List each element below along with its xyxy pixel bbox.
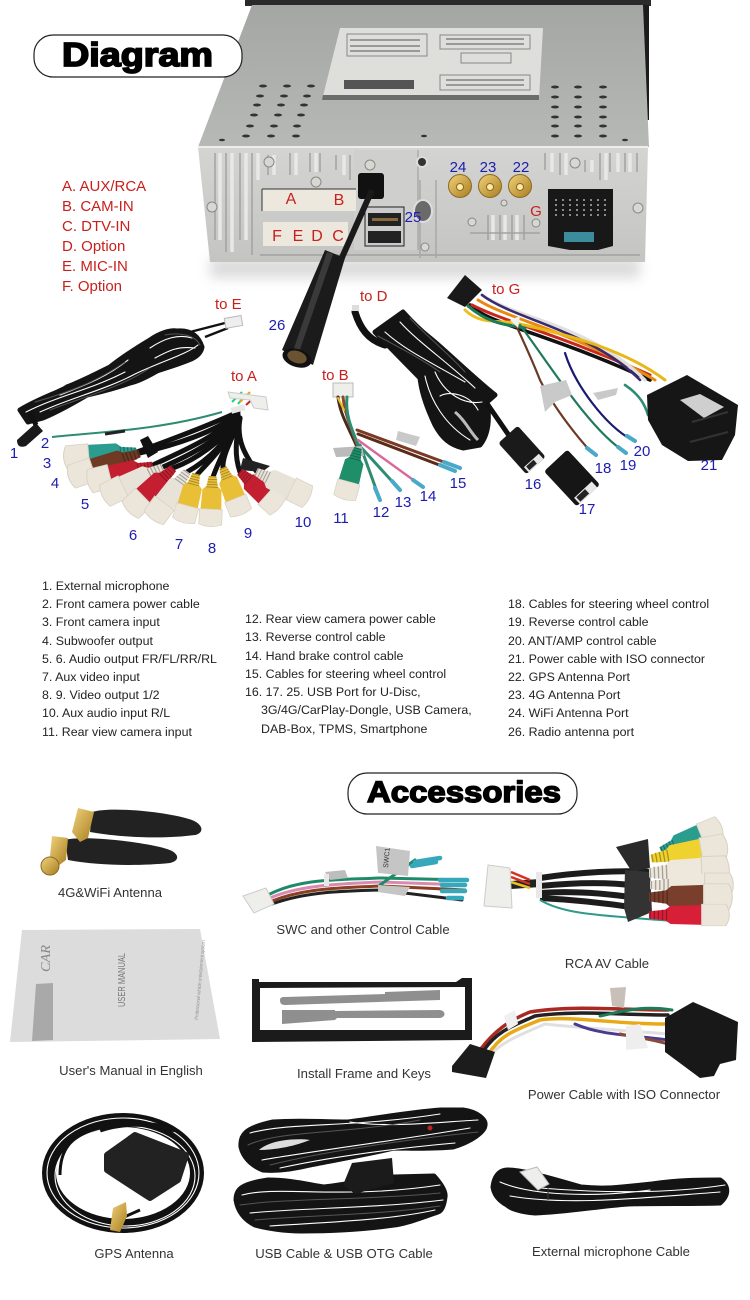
parts list column 2: 3G/4G/CarPlay-Dongle, USB Camera,	[261, 703, 472, 717]
legend: ports A to F: A. AUX/RCA	[62, 178, 146, 195]
parts list column 1: 2. Front camera power cable	[42, 597, 200, 611]
power harness with ISO connector	[447, 275, 738, 461]
parts list column 3: 19. Reverse control cable	[508, 615, 649, 629]
numbers 1 to 10: 2	[41, 435, 49, 452]
numbers 11 to 15: 12	[373, 504, 389, 521]
numbers 18 to 21: 21	[701, 457, 717, 474]
port block A and B: B	[334, 192, 344, 209]
heading: Accessories: Accessories	[367, 776, 561, 809]
parts list column 2: 12. Rear view camera power cable	[245, 612, 436, 626]
parts list column 1: 1. External microphone	[42, 579, 170, 593]
parts list column 1	[42, 579, 217, 739]
control cable harness 11 to 15	[333, 383, 460, 503]
parts list column 1: 8. 9. Video output 1/2	[42, 688, 160, 702]
caption: GPS Antenna: GPS Antenna	[94, 1246, 174, 1261]
port labels: 24	[450, 159, 466, 176]
numbers 18 to 21: 19	[620, 457, 636, 474]
accessory: GPS antenna	[47, 1118, 199, 1232]
label: to A: to A	[231, 368, 257, 385]
legend: ports A to F: F. Option	[62, 278, 122, 295]
legend: ports A to F: D. Option	[62, 238, 125, 255]
power socket	[548, 189, 613, 250]
parts list column 1: 3. Front camera input	[42, 615, 160, 629]
legend: ports A to F	[62, 178, 146, 295]
parts list column 1: 7. Aux video input	[42, 670, 140, 684]
parts list column 1: 11. Rear view camera input	[42, 725, 192, 739]
accessory: external microphone cable	[493, 1167, 727, 1213]
numbers 11 to 15: 13	[395, 494, 411, 511]
parts list column 3	[508, 597, 709, 739]
legend: ports A to F: E. MIC-IN	[62, 258, 128, 275]
port block C D E F: E	[293, 228, 303, 245]
external microphone cable	[17, 316, 243, 447]
USB cable	[352, 305, 600, 506]
label: to D: to D	[360, 288, 388, 305]
port block C D E F: D	[311, 228, 323, 245]
numbers 11 to 15: 14	[420, 488, 436, 505]
parts list column 2: 13. Reverse control cable	[245, 630, 386, 644]
label: to G: to G	[492, 281, 520, 298]
parts list column 2: 14. Hand brake control cable	[245, 649, 404, 663]
accessory: 4G and WiFi antennas	[41, 808, 201, 875]
numbers 1 to 10: 3	[43, 455, 51, 472]
radio antenna cable 26	[280, 173, 384, 371]
numbers 1 to 10: 1	[10, 445, 18, 462]
label: to B: to B	[322, 367, 349, 384]
port block A and B: A	[286, 191, 297, 208]
parts list column 2: 16. 17. 25. USB Port for U-Disc,	[245, 685, 421, 699]
numbers 1 to 10: 9	[244, 525, 252, 542]
port block A and B	[262, 189, 356, 211]
parts list column 2: 15. Cables for steering wheel control	[245, 667, 446, 681]
caption: RCA AV Cable: RCA AV Cable	[565, 956, 649, 971]
radio antenna label: 26	[269, 317, 285, 334]
numbers 18 to 21: 20	[634, 443, 650, 460]
head unit photo	[198, 0, 651, 371]
port labels: 23	[480, 159, 496, 176]
parts list column 3: 21. Power cable with ISO connector	[508, 652, 705, 666]
antenna ports	[448, 174, 532, 198]
port block C D E F	[263, 222, 348, 246]
accessory: install frame and keys	[252, 978, 472, 1042]
parts list column 3: 26. Radio antenna port	[508, 725, 635, 739]
heading: Diagram: Diagram	[62, 36, 213, 73]
accessory: power cable with ISO connector	[452, 987, 738, 1078]
parts list column 3: 22. GPS Antenna Port	[508, 670, 630, 684]
port labels	[405, 159, 542, 226]
numbers 1 to 10: 8	[208, 540, 216, 557]
accessory: user manual: USER MANUAL	[117, 953, 128, 1007]
accessory: SWC control cable	[243, 846, 467, 913]
numbers 11 to 15: 11	[333, 510, 349, 527]
accessory: user manual: CAR	[39, 945, 54, 972]
numbers 1 to 10: 5	[81, 496, 89, 513]
parts list column 3: 18. Cables for steering wheel control	[508, 597, 709, 611]
label: to E: to E	[215, 296, 242, 313]
numbers 16 17: 16	[525, 476, 541, 493]
heading: Accessories	[348, 773, 577, 814]
numbers 1 to 10: 6	[129, 527, 137, 544]
caption: SWC cable: SWC and other Control Cable	[276, 922, 450, 937]
port labels: G	[530, 203, 542, 220]
port block C D E F: F	[272, 228, 282, 245]
usb ports	[365, 207, 404, 246]
numbers 18 to 21	[595, 443, 717, 477]
parts list column 2	[245, 612, 472, 736]
legend: ports A to F: B. CAM-IN	[62, 198, 134, 215]
accessory: user manual: Professional vehicle entertainment system	[194, 940, 207, 1020]
parts list column 1: 4. Subwoofer output	[42, 634, 153, 648]
RCA cable bundle	[52, 392, 315, 527]
port labels: 22	[513, 159, 529, 176]
numbers 1 to 10: 4	[51, 475, 59, 492]
numbers 11 to 15: 15	[450, 475, 466, 492]
port labels: 25	[405, 209, 421, 226]
numbers 1 to 10: 10	[295, 514, 311, 531]
heading: Diagram	[34, 35, 242, 77]
accessory: SWC control cable: SWC1	[383, 847, 392, 868]
caption: 4G and WiFi Antenna: 4G&WiFi Antenna	[58, 885, 163, 900]
parts list column 1: 5. 6. Audio output FR/FL/RR/RL	[42, 652, 217, 666]
accessory: USB cable and USB OTG cable	[236, 1110, 485, 1231]
parts list column 3: 23. 4G Antenna Port	[508, 688, 621, 702]
numbers 1 to 10	[10, 435, 311, 557]
caption: frame: Install Frame and Keys	[297, 1066, 431, 1081]
parts list column 3: 20. ANT/AMP control cable	[508, 634, 657, 648]
accessory: user manual	[10, 929, 220, 1042]
legend: ports A to F: C. DTV-IN	[62, 218, 130, 235]
front panel	[198, 147, 648, 262]
numbers 16 17: 17	[579, 501, 595, 518]
parts list column 3: 24. WiFi Antenna Port	[508, 706, 629, 720]
caption: USB cables: USB Cable & USB OTG Cable	[255, 1246, 433, 1261]
parts list column 2: DAB-Box, TPMS, Smartphone	[261, 722, 428, 736]
numbers 11 to 15	[333, 475, 466, 527]
parts list column 1: 10. Aux audio input R/L	[42, 706, 170, 720]
port block C D E F: C	[332, 228, 344, 245]
accessory: RCA AV cable	[484, 816, 733, 926]
numbers 16 17	[525, 476, 595, 518]
caption: power cable: Power Cable with ISO Connector	[528, 1087, 721, 1102]
numbers 1 to 10: 7	[175, 536, 183, 553]
caption: microphone cable: External microphone Cable	[532, 1244, 690, 1259]
caption: manual: User's Manual in English	[59, 1063, 203, 1078]
numbers 18 to 21: 18	[595, 460, 611, 477]
